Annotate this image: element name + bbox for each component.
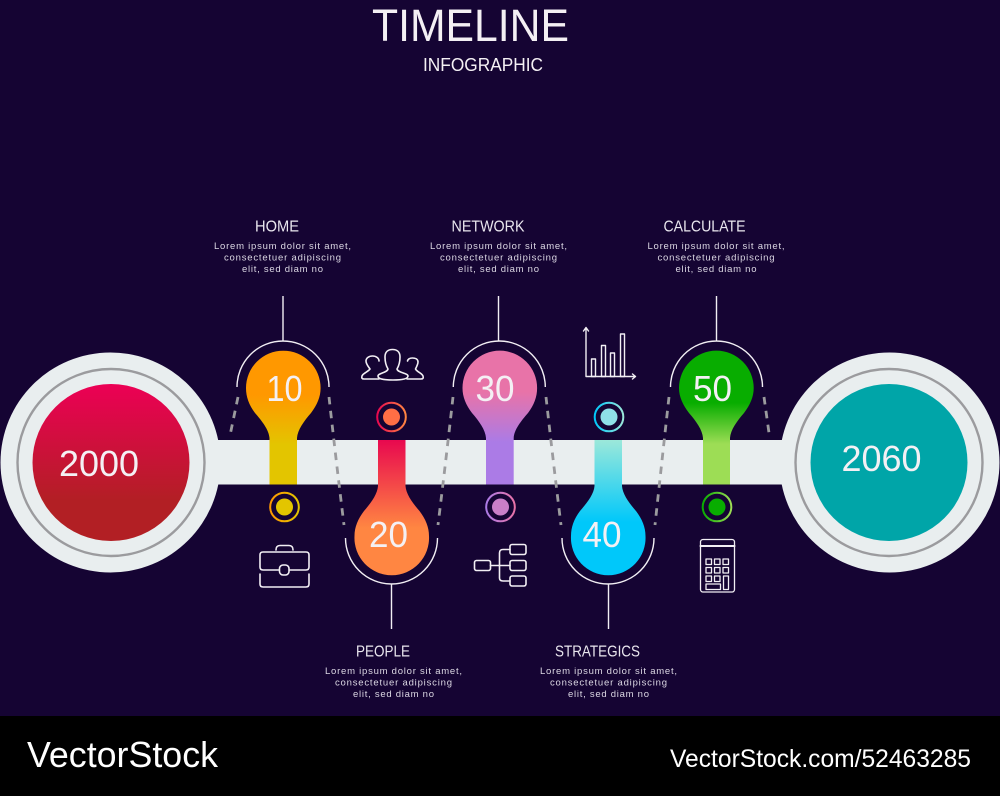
label: network: Lorem ipsum dolor sit amet,: [430, 241, 567, 252]
dashed connectors: [230, 397, 769, 525]
label: strategics: elit, sed diam no: [568, 689, 649, 700]
label: network: elit, sed diam no: [458, 264, 539, 275]
step 50: calculate: 50: [693, 368, 732, 409]
start year node: [0, 352, 220, 572]
label: strategics: Lorem ipsum dolor sit amet,: [540, 666, 677, 677]
label: calculate: CALCULATE: [664, 218, 746, 236]
label: people: [325, 644, 462, 700]
label: calculate: elit, sed diam no: [676, 264, 756, 275]
step 30: network: [453, 296, 545, 521]
icon: calculator: [700, 540, 734, 592]
title: TIMELINE: [372, 0, 569, 51]
step 10: home: [237, 296, 329, 521]
footer image id: VectorStock.com/52463285: [670, 745, 971, 773]
label: strategics: STRATEGICS: [555, 644, 640, 660]
subtitle: INFOGRAPHIC: [423, 55, 543, 75]
end year node: [780, 352, 1000, 572]
label: calculate: [648, 218, 784, 275]
timeline bar: [205, 440, 795, 484]
label: network: NETWORK: [452, 218, 525, 236]
label: people: elit, sed diam no: [353, 689, 434, 700]
icon: briefcase: [260, 546, 309, 587]
step 20: people: 20: [369, 514, 408, 555]
label: calculate: Lorem ipsum dolor sit amet,: [648, 241, 784, 252]
icon: people: [362, 350, 423, 380]
label: strategics: [540, 644, 677, 700]
end year node: 2060: [842, 438, 922, 479]
start year node: 2000: [59, 443, 139, 484]
label: home: elit, sed diam no: [242, 264, 323, 275]
label: calculate: consectetuer adipiscing: [658, 252, 774, 264]
step 40: strategics: [562, 403, 654, 629]
footer bar: [0, 716, 1000, 796]
label: home: Lorem ipsum dolor sit amet,: [214, 241, 351, 252]
step 10: home: 10: [266, 368, 302, 409]
step 50: calculate: [670, 296, 762, 521]
label: home: [214, 218, 351, 275]
footer logo: VectorStock: [27, 734, 219, 775]
label: people: consectetuer adipiscing: [335, 678, 452, 688]
step 20: people: [346, 403, 438, 629]
icon: bar chart: [584, 328, 636, 379]
label: home: HOME: [255, 218, 299, 236]
icon: network: [474, 544, 526, 586]
label: people: Lorem ipsum dolor sit amet,: [325, 666, 462, 677]
step 40: strategics: 40: [582, 514, 622, 555]
label: strategics: consectetuer adipiscing: [550, 678, 667, 688]
label: network: consectetuer adipiscing: [440, 252, 557, 264]
label: home: consectetuer adipiscing: [224, 252, 341, 264]
label: network: [430, 218, 567, 275]
label: people: PEOPLE: [356, 644, 410, 660]
step 30: network: 30: [476, 368, 514, 409]
